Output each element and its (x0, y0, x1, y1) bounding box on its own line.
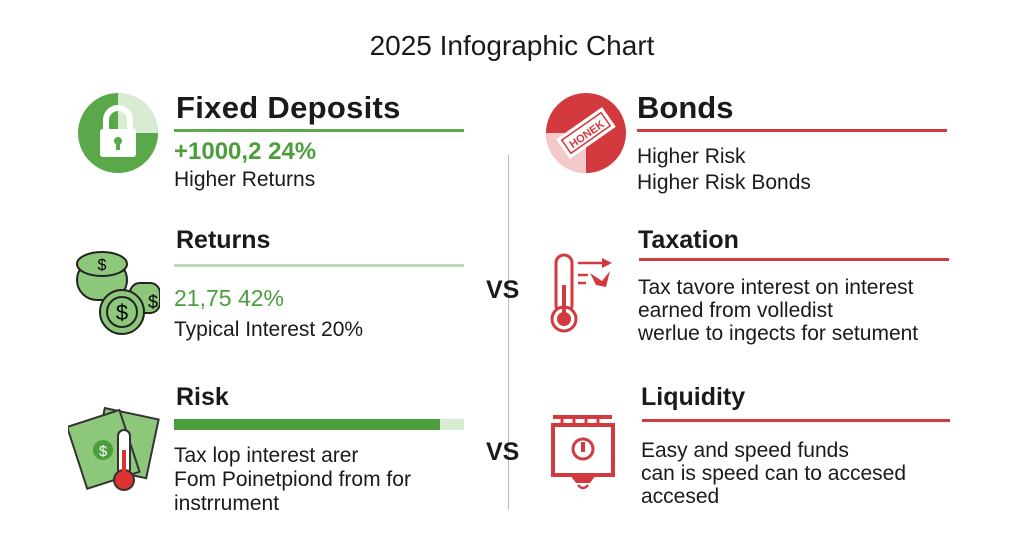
panel: liquidity: Easy and speed funds (641, 439, 849, 462)
panel: fixed deposits: Higher Returns (174, 168, 315, 191)
icon: money with thermometer: $ (99, 443, 108, 460)
icon: money with thermometer (68, 406, 160, 491)
value: 21,75 42% (174, 285, 284, 311)
bar (174, 419, 464, 430)
icon: lock (78, 93, 158, 173)
panel: bonds (546, 90, 947, 194)
divider (508, 155, 509, 510)
panel: liquidity (551, 383, 950, 508)
panel: risk (68, 383, 464, 515)
panel: risk: Tax lop interest arer (174, 444, 358, 467)
icon: coins: $ (148, 292, 158, 312)
heading: Taxation (638, 226, 739, 254)
icon: bond ticket: HONEK (567, 118, 607, 151)
heading: Returns (176, 226, 270, 254)
panel: taxation: earned from volledist (638, 299, 833, 322)
panel: taxation (550, 226, 949, 345)
panel: liquidity: accesed (641, 485, 719, 508)
panel: bonds: Higher Risk (637, 145, 746, 168)
heading: Risk (176, 383, 229, 411)
VS label top: VS (486, 276, 519, 304)
heading: Bonds (637, 90, 733, 125)
panel: returns: Typical Interest 20% (174, 318, 363, 341)
panel: fixed deposits (78, 90, 464, 191)
VS label bottom: VS (486, 438, 519, 466)
panel: risk: Fom Poinetpiond from for (174, 468, 411, 491)
icon: coins (76, 251, 160, 335)
icon: liquidity device (551, 415, 615, 490)
panel: risk: instrrument (174, 492, 279, 515)
icon: thermometer (550, 254, 612, 332)
panel: taxation: Tax tavore interest on interest (638, 276, 913, 299)
panel: returns (76, 226, 464, 341)
panel: bonds: Higher Risk Bonds (637, 171, 811, 194)
heading: Fixed Deposits (176, 90, 401, 125)
icon: coins: $ (98, 257, 107, 274)
icon: coins: $ (116, 300, 128, 325)
panel: taxation: werlue to ingects for setument (638, 322, 918, 345)
title: 2025 Infographic Chart (370, 30, 654, 61)
heading: Liquidity (641, 383, 745, 411)
icon: bond ticket (546, 93, 626, 173)
value: +1000,2 24% (174, 138, 316, 165)
panel: liquidity: can is speed can to accesed (641, 462, 906, 485)
